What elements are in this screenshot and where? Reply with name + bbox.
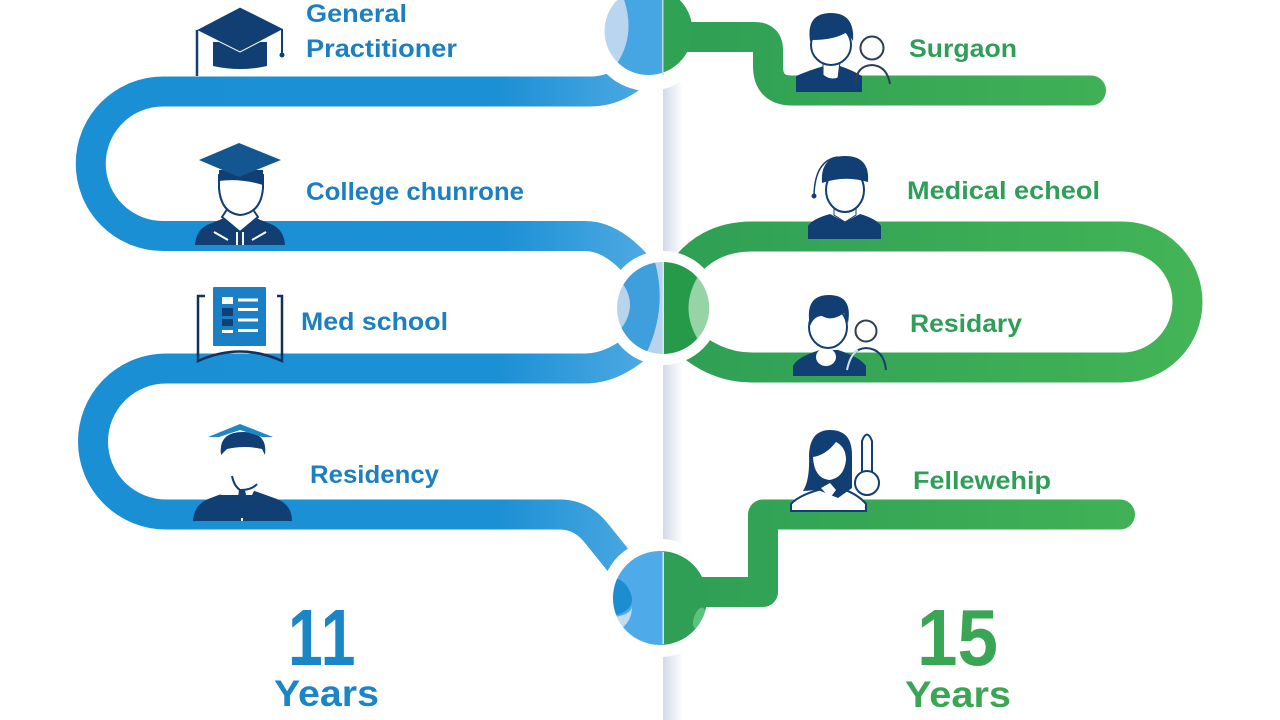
label: college: College chunrone — [306, 178, 524, 206]
icon: fellow with thermometer — [791, 430, 879, 511]
bottom milestone node — [612, 550, 709, 646]
label: fellowship: Fellewehip — [913, 467, 1051, 495]
general practitioner path — [91, 78, 645, 575]
stat: 15 years: Years — [905, 674, 1011, 715]
icon: resident with colleague — [793, 295, 886, 376]
label: residency, surgeon side: Residary — [910, 310, 1022, 338]
top milestone node — [604, 0, 692, 75]
label: med school: Med school — [301, 308, 448, 336]
stat: 11 years — [274, 594, 379, 714]
icon: open book — [198, 287, 282, 361]
stat: 11 years: Years — [274, 673, 379, 714]
label: general practitioner — [306, 0, 457, 63]
icon: resident with cap — [193, 424, 292, 521]
label: general practitioner: General — [306, 0, 407, 28]
label: general practitioner: Practitioner — [306, 35, 457, 63]
surgeon path: middle loop — [680, 236, 1188, 368]
label: residency: Residency — [310, 461, 439, 489]
stat: 11 years: 11 — [288, 594, 355, 683]
stat: 15 years — [905, 593, 1011, 715]
label: surgeon: Surgaon — [909, 35, 1017, 63]
stat: 15 years: 15 — [917, 593, 998, 682]
label: medical school: Medical echeol — [907, 177, 1100, 205]
middle milestone node — [615, 260, 712, 356]
surgeon path: top and bottom segments — [680, 37, 1120, 592]
icon: medical student — [808, 156, 881, 239]
icon: college graduate — [195, 143, 285, 245]
icon: graduation cap — [196, 7, 284, 76]
icon: surgeon with colleague — [796, 13, 890, 92]
